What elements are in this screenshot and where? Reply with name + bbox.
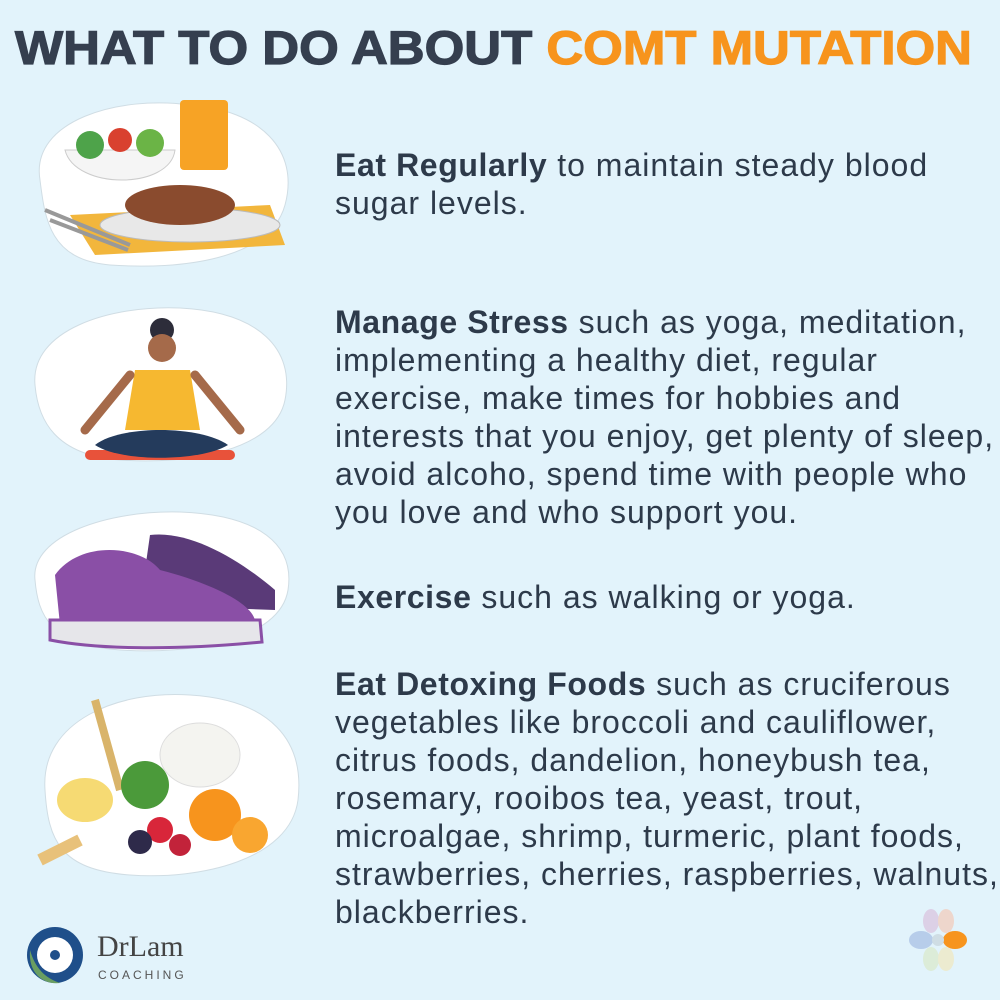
text: detox foods: rosemary, rooibos tea, yeast, trout,: [335, 780, 863, 816]
text: detox foods: Eat Detoxing Foods such as cruciferous: [335, 666, 951, 702]
text: manage stress: interests that you enjoy, get plenty of sleep,: [335, 418, 994, 454]
text: sugar levels.: [335, 185, 528, 221]
text: manage stress: [335, 304, 994, 530]
icon: flower: [909, 909, 967, 971]
title: WHAT TO DO ABOUT COMT MUTATION: [15, 21, 972, 74]
text: manage stress: implementing a healthy diet, regular: [335, 342, 878, 378]
text: manage stress: you love and who support you.: [335, 494, 798, 530]
illustration: yoga woman: [34, 307, 287, 462]
text: detox foods: blackberries.: [335, 894, 529, 930]
text: exercise: Exercise such as walking or yoga.: [335, 579, 856, 615]
text: manage stress: avoid alcoho, spend time with people who: [335, 456, 967, 492]
text: eat regularly: Eat Regularly to maintain steady blood: [335, 147, 928, 183]
text: manage stress: exercise, make times for hobbies and: [335, 380, 901, 416]
illustration: meal plate: [38, 100, 288, 266]
text: manage stress: Manage Stress such as yoga, meditation,: [335, 304, 966, 340]
logo: DrLam coaching: DrLam: [97, 930, 184, 963]
text: detox foods: citrus foods, dandelion, honeybush tea,: [335, 742, 931, 778]
logo: DrLam coaching: COACHING: [98, 968, 187, 982]
text: detox foods: [335, 666, 999, 930]
illustration: detox foods: [37, 694, 300, 876]
logo: DrLam coaching: [27, 927, 187, 984]
text: detox foods: vegetables like broccoli and cauliflower,: [335, 704, 936, 740]
text: detox foods: microalgae, shrimp, turmeric, plant foods,: [335, 818, 964, 854]
text: detox foods: strawberries, cherries, raspberries, walnuts,: [335, 856, 999, 892]
illustration: sneakers: [34, 512, 290, 652]
